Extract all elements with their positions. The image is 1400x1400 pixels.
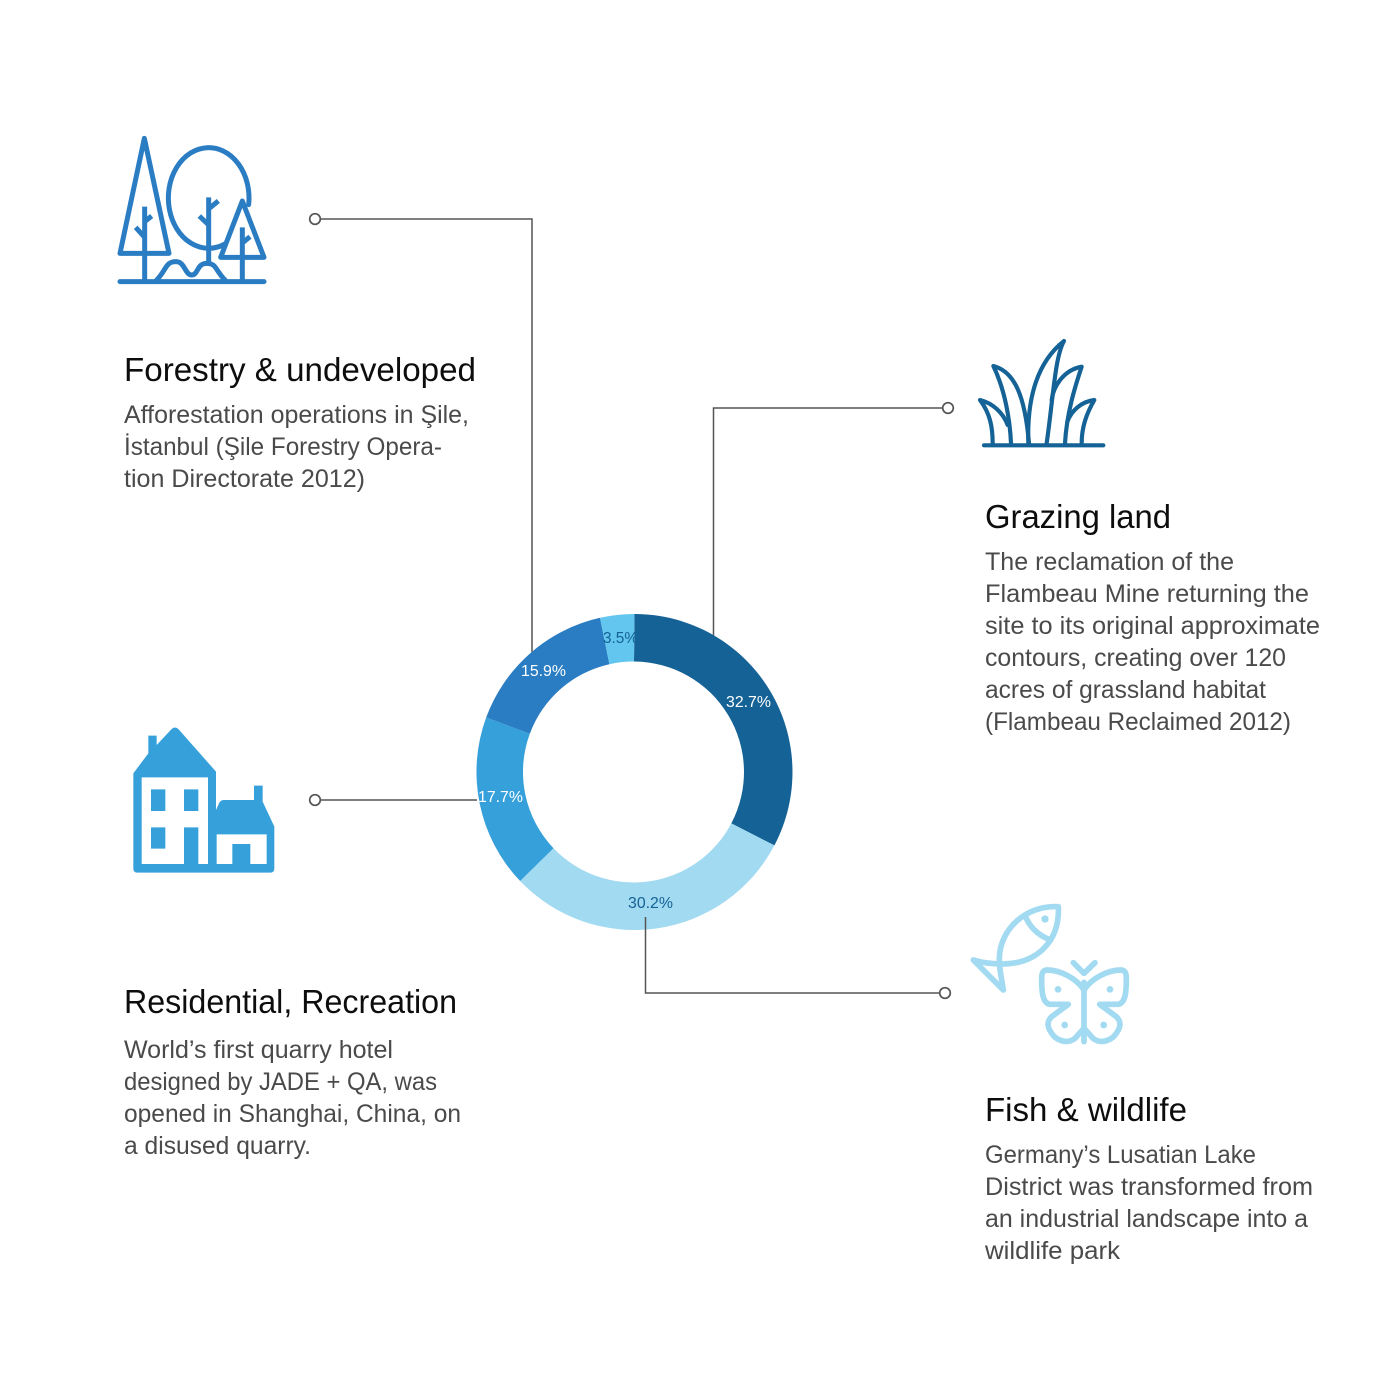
- icon: trees: [120, 138, 264, 282]
- description: residential: World’s first quarry hotel: [124, 1036, 393, 1064]
- icon: houses: [133, 727, 274, 873]
- icon: fish and butterfly: [973, 907, 1126, 1042]
- heading: fish and wildlife: Fish & wildlife: [985, 1091, 1187, 1128]
- connector: grazing land to donut: [714, 403, 953, 637]
- description: fish and wildlife: [984, 1141, 1313, 1265]
- text block: grazing land: [985, 498, 1320, 736]
- segment: residential 17.7%: [476, 717, 554, 881]
- description: residential: opened in Shanghai, China, on: [124, 1100, 461, 1128]
- description: forestry: [124, 401, 469, 493]
- segment: other 3.5%: [600, 614, 634, 664]
- heading: grazing land: Grazing land: [985, 498, 1171, 535]
- connector: fish and wildlife to donut: [646, 917, 950, 998]
- fish: [973, 907, 1058, 990]
- heading: residential and recreation: Residential, Recreation: [124, 983, 457, 1020]
- butterfly: [1042, 963, 1126, 1042]
- donut chart: [476, 614, 792, 930]
- description: grazing land: [985, 548, 1320, 736]
- text block: residential and recreation: [124, 983, 461, 1160]
- description: grazing land: Flambeau Mine returning the: [985, 580, 1309, 608]
- icon: grass: [980, 341, 1103, 445]
- description: fish and wildlife: Germany’s Lusatian Lake: [985, 1141, 1256, 1169]
- text block: forestry and undeveloped: [124, 351, 476, 493]
- segment: grazing land 32.7%: [634, 614, 792, 845]
- segment: forestry 15.9%: [486, 618, 609, 734]
- description: grazing land: (Flambeau Reclaimed 2012): [985, 708, 1291, 736]
- value label 30.2%: 30.2%: [628, 895, 673, 912]
- value label 3.5%: 3.5%: [603, 630, 638, 647]
- description: residential: [124, 1036, 461, 1160]
- description: grazing land: site to its original approximate: [985, 612, 1320, 640]
- description: forestry: tion Directorate 2012): [124, 465, 365, 493]
- description: residential: designed by JADE + QA, was: [124, 1068, 437, 1096]
- segment: fish and wildlife 30.2%: [520, 823, 774, 930]
- description: forestry: Afforestation operations in Şile,: [124, 401, 469, 429]
- description: fish and wildlife: wildlife park: [984, 1237, 1121, 1265]
- description: residential: a disused quarry.: [124, 1132, 311, 1160]
- description: fish and wildlife: an industrial landscape into a: [985, 1205, 1308, 1233]
- connector: residential to donut: [310, 795, 477, 805]
- value label 17.7%: 17.7%: [478, 789, 523, 806]
- value label 32.7%: 32.7%: [726, 694, 771, 711]
- description: grazing land: contours, creating over 120: [985, 644, 1286, 672]
- description: fish and wildlife: District was transformed from: [985, 1173, 1313, 1201]
- value label 15.9%: 15.9%: [521, 663, 566, 680]
- heading: forestry and undeveloped: Forestry & undeveloped: [124, 351, 476, 388]
- text block: fish and wildlife: [984, 1091, 1313, 1265]
- connector: forestry to donut: [310, 214, 532, 652]
- description: grazing land: acres of grassland habitat: [985, 676, 1266, 704]
- description: forestry: İstanbul (Şile Forestry Opera-: [124, 432, 442, 461]
- description: grazing land: The reclamation of the: [985, 548, 1234, 576]
